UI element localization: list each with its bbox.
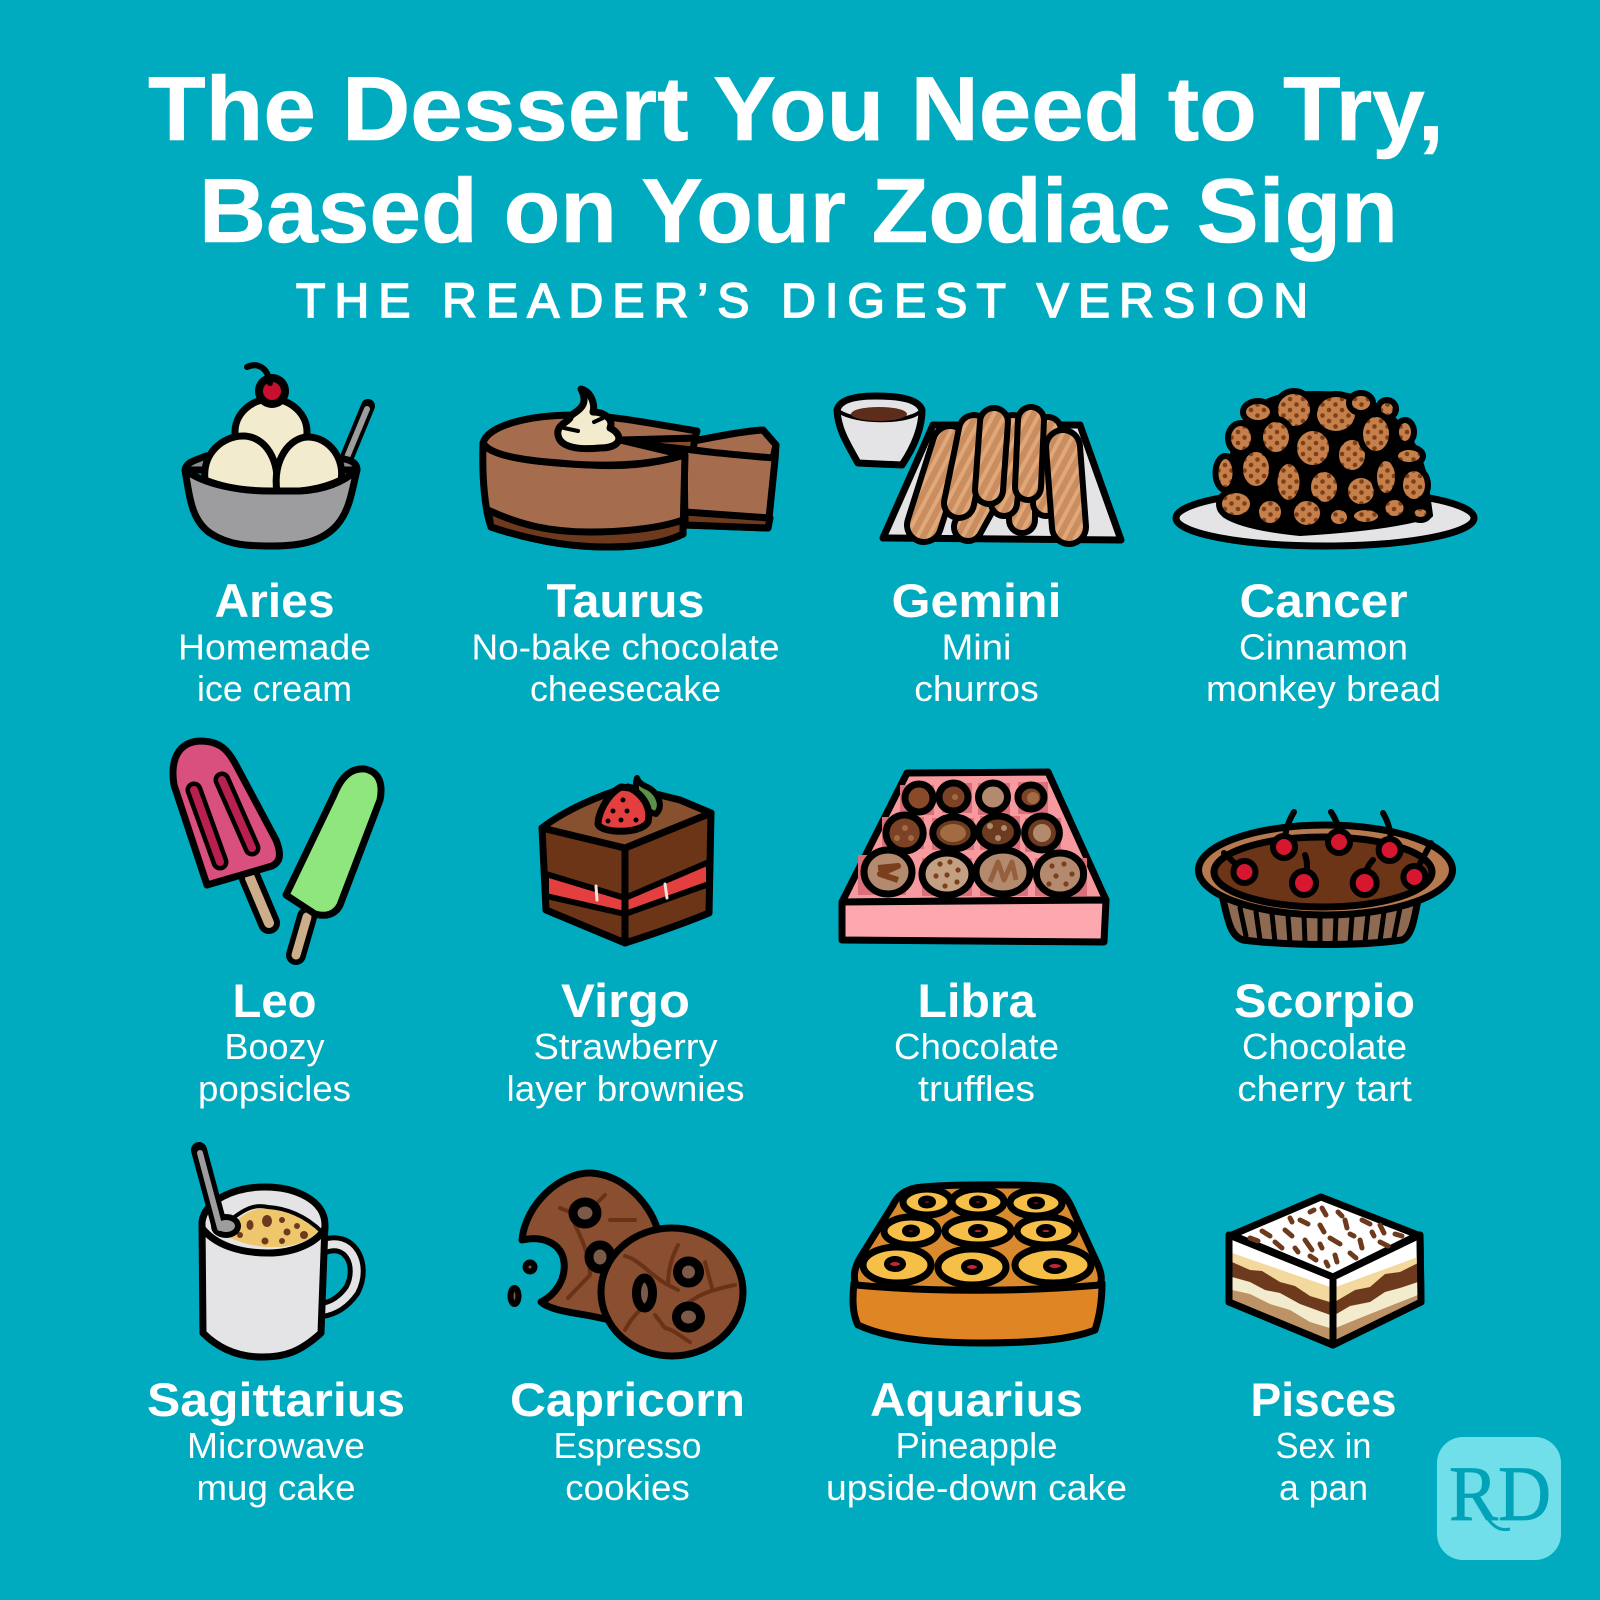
panel: Leo — [173, 741, 381, 1109]
panel: Gemini — [837, 396, 1121, 709]
description: Microwave mug cake — [187, 1425, 365, 1508]
logo: RD: RD — [1449, 1450, 1551, 1537]
icon: mini churros — [837, 396, 1121, 540]
description: Strawberry layer brownies: layer brownies — [506, 1068, 744, 1109]
logo: RD — [1437, 1437, 1561, 1560]
description: Pineapple upside-down cake: upside-down cake — [826, 1467, 1127, 1508]
icon: pineapple upside-down cake — [853, 1185, 1102, 1343]
description: Boozy popsicles: popsicles — [198, 1068, 351, 1109]
panel: Capricorn — [510, 1173, 745, 1508]
panel: Taurus — [472, 389, 780, 709]
description: Chocolate cherry tart: cherry tart — [1237, 1068, 1412, 1109]
icon: popsicles — [173, 741, 381, 955]
description: Boozy popsicles — [198, 1026, 351, 1109]
description: Homemade ice cream: Homemade — [178, 626, 371, 668]
icon: ice cream bowl — [185, 365, 368, 546]
description: Chocolate truffles: truffles — [918, 1068, 1035, 1109]
title: The Dessert You Need to Try, — [148, 59, 1444, 160]
icon: chocolate cherry tart — [1198, 812, 1452, 944]
description: Sex in a pan — [1276, 1425, 1372, 1508]
icon: espresso cookies — [510, 1173, 743, 1356]
panel: Pisces — [1229, 1197, 1421, 1508]
description: Mini churros: Mini — [942, 626, 1012, 668]
description: Pineapple upside-down cake: Pineapple — [896, 1425, 1058, 1466]
icon: chocolate cheesecake — [483, 389, 776, 547]
name: Aries: Aries — [214, 574, 334, 627]
description: Homemade ice cream — [178, 626, 371, 709]
subtitle: THE READER’S DIGEST VERSION — [296, 275, 1308, 328]
description: Cinnamon monkey bread: Cinnamon — [1239, 626, 1408, 668]
description: No-bake chocolate cheesecake: cheesecake — [530, 668, 721, 709]
name: Pisces: Pisces — [1250, 1373, 1396, 1426]
description: Homemade ice cream: ice cream — [197, 668, 352, 709]
description: No-bake chocolate cheesecake: No-bake chocolate — [472, 626, 780, 668]
name: Aquarius: Aquarius — [870, 1373, 1083, 1426]
icon: strawberry layer brownie — [542, 778, 711, 943]
description: Espresso cookies — [554, 1425, 702, 1508]
name: Taurus: Taurus — [546, 574, 704, 627]
description: Chocolate truffles: Chocolate — [894, 1026, 1059, 1067]
icon: monkey bread — [1176, 391, 1474, 546]
description: Strawberry layer brownies: Strawberry — [534, 1026, 718, 1067]
name: Leo: Leo — [232, 974, 316, 1027]
description: Strawberry layer brownies — [506, 1026, 744, 1109]
description: Cinnamon monkey bread: monkey bread — [1206, 668, 1441, 709]
panel: Aquarius — [826, 1185, 1127, 1508]
panel: Cancer — [1176, 391, 1474, 709]
icon: box of chocolate truffles — [842, 772, 1106, 942]
description: Mini churros — [914, 626, 1039, 709]
description: Sex in a pan: Sex in — [1276, 1425, 1372, 1466]
panel: Virgo — [506, 778, 744, 1109]
panel: Scorpio — [1198, 812, 1452, 1109]
description: Espresso cookies: Espresso — [554, 1425, 702, 1466]
description: Cinnamon monkey bread — [1206, 626, 1441, 709]
description: Pineapple upside-down cake — [826, 1425, 1127, 1508]
icon: sex in a pan dessert — [1229, 1197, 1421, 1345]
description: Microwave mug cake: Microwave — [187, 1425, 365, 1466]
name: Sagittarius: Sagittarius — [147, 1373, 405, 1426]
name: Cancer: Cancer — [1240, 574, 1408, 627]
description: Espresso cookies: cookies — [565, 1467, 690, 1508]
icon: microwave mug cake — [199, 1150, 357, 1357]
title — [148, 59, 1444, 262]
description: Chocolate cherry tart: Chocolate — [1242, 1026, 1407, 1067]
description: No-bake chocolate cheesecake — [472, 626, 780, 709]
name: Virgo: Virgo — [561, 974, 690, 1027]
name: Capricorn: Capricorn — [510, 1373, 745, 1426]
description: Mini churros: churros — [914, 668, 1039, 709]
description: Sex in a pan: a pan — [1279, 1467, 1368, 1508]
description: Microwave mug cake: mug cake — [196, 1467, 356, 1508]
description: Chocolate cherry tart — [1237, 1026, 1412, 1109]
panel: Libra — [842, 772, 1106, 1109]
panel: Sagittarius — [147, 1150, 405, 1508]
description: Chocolate truffles — [894, 1026, 1059, 1109]
panel: Aries — [178, 365, 371, 709]
name: Gemini: Gemini — [892, 574, 1062, 627]
description: Boozy popsicles: Boozy — [224, 1026, 324, 1067]
name: Scorpio: Scorpio — [1234, 974, 1415, 1027]
title: Based on Your Zodiac Sign — [199, 161, 1398, 262]
name: Libra: Libra — [918, 974, 1036, 1027]
